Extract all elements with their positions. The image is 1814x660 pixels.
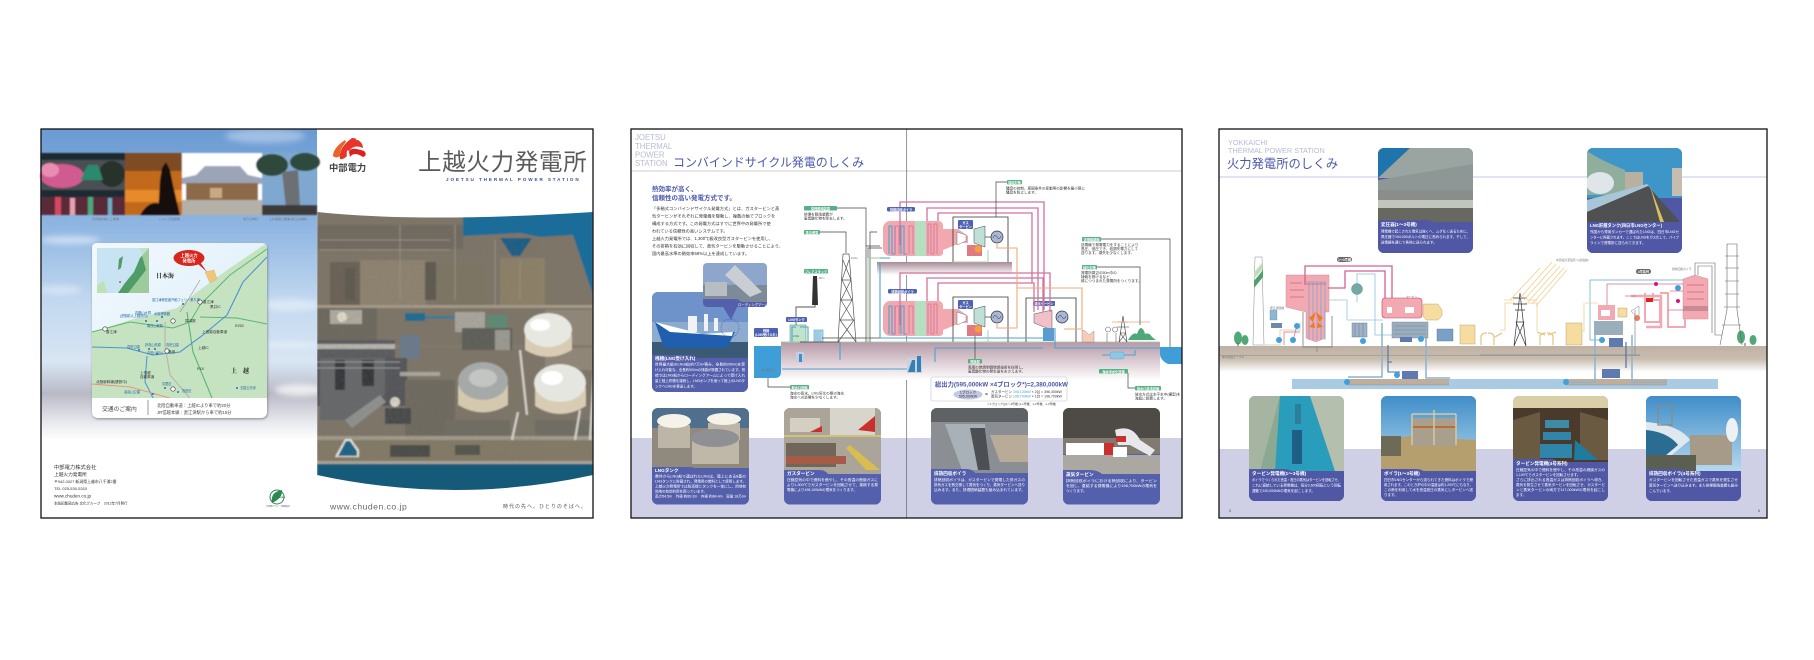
photo card: turbine generator units 1-3: タービン発電機(1〜3号機): [1252, 470, 1307, 477]
label: seawater intake: 海水の取水、LNG気化の際の海水: [790, 390, 845, 396]
intake canal: [1292, 379, 1718, 389]
steam turbine unit: [1026, 298, 1076, 342]
photo card: turbine generator unit 4: ます。: [1516, 492, 1526, 497]
photo card: LNG receiving tank: 外国から専用タンカーで運ばれたLNGは、四日市LNGセ: [1590, 229, 1680, 234]
heading: station name: STATION: [635, 159, 668, 168]
label: environment: 環境対策: [1008, 180, 1022, 185]
lower HRSG and gas turbine: ガス: [962, 300, 969, 305]
label: transmission: 送ります。損失を少なくします。: [1081, 250, 1134, 255]
diagram tags: 排熱回収ボイラ: [1672, 267, 1692, 271]
photo card: boiler units 1-3: この熱を利用して水を高温高圧の蒸気にしタービンへ送: [1384, 487, 1473, 492]
photo card: LNG tanks: 上越火力発電所では防液提とタンクを一体にし、用地有: [655, 484, 747, 488]
inset photo: loading arm: ローディングアーム: [738, 302, 769, 307]
upper HRSG and gas turbine: [883, 217, 1008, 262]
output summary box: =: [985, 392, 988, 398]
label: greenery: 緑化対策: [1083, 265, 1097, 270]
heading: station name: [1228, 138, 1325, 155]
photo card: turbine generator unit 4: さらに排出される高温ガスは排熱回収ボイラへ導き、: [1516, 477, 1605, 482]
combined cycle plant diagram: [754, 180, 1182, 400]
labels: [754, 180, 1181, 400]
company address: TEL 025-530-5310: [54, 486, 88, 491]
photo card: main transformer: 昇圧器で154,000ボルトの電圧に高められます。そして、: [1381, 234, 1470, 239]
label: denitrification: [804, 206, 866, 246]
company address: 上越火力発電所: [54, 471, 87, 478]
photo card: LNG receiving tank: LNG貯蔵タンク(四日市LNGセンター): [1590, 222, 1662, 229]
intro text block: 上越火力発電所では、1,300℃級改良型ガスタービンを使用し、: [652, 235, 773, 242]
substation, transformer and trees: [1082, 316, 1156, 342]
photo card: turbine generator unit 4: 蒸気を発生させて蒸気タービンを回転させ、ガスタービ: [1516, 482, 1606, 487]
vaporiser: [814, 330, 823, 342]
panel: brochure cover: [38, 129, 594, 518]
land: [92, 243, 267, 398]
heading: station name: POWER: [635, 150, 665, 160]
access map card: 清里区: [162, 381, 172, 386]
map place names: 上 越: [231, 367, 249, 375]
company address: 中部電力株式会社: [54, 463, 97, 471]
access map card: 直江津: [106, 329, 117, 334]
label: environment: 騒音を防止します。: [1006, 190, 1038, 194]
intro text block: その排熱を有効に回収して、蒸気タービンを駆動させることにより、: [652, 242, 783, 250]
intro text block: 気タービンがそれぞれに発電機を駆動し、複数の軸でブロックを: [652, 212, 775, 220]
output summary box: 総出力(595,000kW ×4ブロック*)=2,380,000kW: [935, 380, 1068, 388]
access map card: 犀潟駅: [185, 318, 196, 323]
callout: plant location: 上越火力: [180, 252, 198, 259]
photo card: LNG tanks: LNGタンクに貯蔵され、発電用の燃料として使用します。: [655, 478, 746, 484]
upper platform shadow: [877, 262, 1012, 275]
photo card: turbine generator unit 4: 圧縮空気の中で燃料を燃やし、その高温の燃焼ガスの: [1516, 467, 1606, 472]
trees: [1234, 330, 1756, 346]
photo card: steam turbine: [1063, 408, 1160, 505]
ground band: [1219, 346, 1767, 372]
access map card: 上越IC: [198, 345, 209, 350]
LNG tank: [790, 325, 806, 342]
label: transmission: 送電線路網: [1084, 237, 1099, 242]
website url: www.chuden.co.jp: [329, 502, 407, 512]
label: combustor: 燃焼器: [970, 359, 981, 364]
output summary box: 1ブロック: [960, 390, 977, 394]
intro heading: 信頼性の高い発電方式です。: [652, 193, 736, 202]
output summary box: 595,000kW: [959, 394, 978, 398]
panel border: [631, 129, 1182, 518]
access map card: 岩殿山大洞: [135, 310, 151, 315]
label: LNG tank: LNGタンク: [788, 317, 805, 322]
label: seawater intake: 海水への影響を少なくします。: [790, 394, 840, 400]
fuel piping: [781, 232, 1040, 369]
photo card: LNG carrier at jetty: 桟橋(LNG受け入れ): [655, 355, 696, 362]
access map card: R253: [235, 324, 244, 328]
inset map: [97, 248, 149, 293]
photo card: heat recovery boiler unit 4: 排熱回収ボイラ(4号系列): [1649, 470, 1701, 477]
access directions: [102, 400, 232, 416]
photo card: heat recovery boiler: 排熱回収ボイラ: [934, 470, 967, 477]
photo card: gas turbine: ガスタービン: [787, 470, 815, 477]
label: combustor: [968, 336, 1026, 374]
photo card: turbine generator units 1-3: 運動で220,000kWの電気を起こします。: [1252, 488, 1315, 493]
access directions: JR信越本線：直江津駅から車で約15分: [157, 409, 232, 416]
photo card: turbine generator unit 4: [1513, 396, 1608, 501]
access map card: 黒井IC: [210, 304, 221, 309]
label: combustor: 高度の燃焼制御燃焼技術を採用し、: [968, 364, 1026, 370]
access map card: 高田公園: [166, 342, 179, 347]
label: jetty: 海水取水口: [761, 368, 775, 372]
photo captions: レルヒ少佐銅像: [159, 216, 180, 221]
photo card: boiler units 1-3: 四日市LNGセンターから送られてきた燃料はボイラで燃: [1384, 477, 1473, 482]
access map card: 五智公光寺: [240, 385, 257, 390]
right unit piping: [1480, 280, 1683, 382]
intro text block: [652, 205, 783, 257]
exhaust tower: 100m: [851, 256, 859, 260]
access map card: [92, 243, 267, 418]
photo texture: [317, 238, 539, 461]
heading: station name: [635, 133, 673, 168]
photo card: heat recovery boiler: 排熱回収ボイラは、ガスタービンで発電した排ガスの: [934, 477, 1026, 482]
logo: Chubu Electric Power: 中部電力: [329, 162, 366, 173]
page numbers: [1229, 509, 1760, 513]
photo card: LNG tanks: 効地の有効利用を図っています。: [655, 488, 707, 494]
lower HRSG and gas turbine: タービン: [959, 304, 972, 309]
lavender bottom band: [631, 438, 1182, 518]
steam piping: [880, 202, 1160, 362]
heaters, transformer and pumps: [1276, 285, 1681, 385]
photo card: LNG receiving tank: ンターに貯蔵されます。ここではLNGをガス化して、パイプ: [1590, 234, 1679, 240]
access map card: 高田: [168, 349, 176, 354]
tagline: 時代の先へ。ひとりのそばへ。: [503, 503, 587, 510]
page numbers: 6: [1758, 509, 1760, 513]
access map card: 春日山城跡: [147, 323, 164, 328]
label: discharge facility: 海水淡水化設備: [1102, 369, 1125, 374]
photo card: LNG receiving tank: [1586, 148, 1682, 253]
photo card: gas turbine: 圧縮空気の中で燃料を燃やし、その高温の燃焼ガスに: [787, 477, 879, 482]
photo card: boiler units 1-3: 焼されます。このとき炉の中の温度は約1,200℃にもなり、: [1384, 482, 1473, 487]
panel border: [1219, 129, 1767, 518]
access map card: 上信越自動車道: [202, 329, 228, 334]
intro heading: [652, 184, 736, 202]
photo card: heat recovery boiler unit 4: こんでいます。: [1649, 488, 1673, 493]
photo card: heat recovery boiler: 排気ガスを熱交換して蒸気をつくり、蒸気タービンへ送り: [934, 482, 1025, 487]
company address: 〒942-0027 新潟県上越市八千浦2番: [54, 479, 117, 484]
photo strip: local sights: [40, 153, 320, 215]
label: stack: 集合煙突: [806, 230, 819, 235]
photo card: steam turbine: つくります。: [1066, 488, 1087, 493]
photo card: LNG carrier at jetty: 量と陸上貯槽を接続し、LNGポンプを使って陸上のLNGタ: [655, 378, 745, 383]
access map card: (虎御前入上越市内): [120, 313, 148, 318]
label: LNG tank: [786, 317, 807, 322]
sea: [92, 243, 267, 332]
photo card: LNG carrier at jetty: け入れ可能な、全長約500mの桟橋が設置されています。桟: [655, 367, 745, 372]
photo card: heat recovery boiler unit 4: 蒸気タービンへ送り込みます。また排煙脱硝装置も組み: [1649, 482, 1739, 488]
map landmarks: [138, 303, 238, 395]
label: HRSG bottom: 排熱回収ボイラ: [891, 289, 914, 294]
photo card: LNG carrier at jetty: ンクへLNGを移送します。: [655, 384, 697, 388]
flare stack: [796, 276, 825, 328]
title: how combined cycle works: コンバインドサイクル発電のしくみ: [673, 156, 864, 170]
intro heading: 熱効率が高く、: [652, 184, 698, 193]
steam turbine unit: 蒸気タービン: [1034, 301, 1054, 306]
turbine and generator: [1382, 298, 1442, 342]
chimney: [1253, 257, 1264, 345]
access map card: R18: [197, 367, 204, 371]
heading: station name: THERMAL POWER STATION: [1228, 146, 1325, 155]
seawater right: [1160, 347, 1182, 364]
label: greenery: 緑につつまれた発電所をつくります。: [1081, 278, 1142, 283]
photo card: boiler units 1-3: [1381, 396, 1476, 501]
label: discharge facility: [1099, 369, 1128, 374]
photo card: LNG tanks: 県外からLNG船で運ばれたLNGは、陸上にある8基の: [655, 474, 747, 478]
diagram tags: タービン: [1406, 295, 1417, 299]
label: denitrification: 窒素酸化物を除去します。: [804, 216, 847, 220]
access map card: 高田公園: [127, 344, 140, 349]
label: HRSG top: 排熱回収ボイラ: [890, 207, 912, 212]
access map card: 北陸新幹線(建設中): [96, 379, 127, 384]
label: flare stack: フレアスタック: [805, 269, 827, 274]
photo captions: 上杉謙信公銅像(春日山城跡): [269, 216, 307, 221]
label: greenery: 植栽を設けるなど、: [1081, 274, 1113, 279]
label: jetty: [754, 328, 778, 372]
label: environment: [996, 180, 1085, 217]
callout: plant location: 発電所: [183, 258, 196, 264]
output summary box: ガスタービン 198,100kW × 2台 = 396,300kW: [991, 389, 1063, 394]
photo card: LNG receiving tank: ラインで発電所に送られてきます。: [1590, 240, 1645, 245]
photo card: turbine generator unit 4: タービン発電機(4号系列): [1516, 460, 1568, 467]
diagram tags: 中部電力変電所へ(送電線): [1556, 258, 1589, 262]
seawater left: [754, 346, 781, 378]
photo card: main transformer: 変圧器(1〜3号機): [1381, 221, 1417, 228]
label: seawater intake: 取水口設備: [792, 385, 808, 390]
icon: eco mark: [266, 490, 290, 508]
access map card: 上信越: [140, 370, 151, 375]
photo card: turbine generator units 1-3: ボイラでつくられた高温・高圧の蒸気はタービンを回転させ、: [1252, 477, 1341, 482]
photo card: LNG tanks: LNGタンク: [655, 467, 679, 474]
heading: station name: JOETSU: [635, 133, 666, 142]
photo card: steam turbine: 排熱回収ボイラにおける熱回収により、タービン: [1066, 478, 1158, 483]
photo card: turbine generator unit 4: ンと蒸気タービンの両方で117,000kWの電気を起こし: [1516, 487, 1606, 492]
LNG tank: LNG: [793, 334, 800, 338]
photo card: main transformer: 発電機で起こされた電気は強くへ、ムダなく送るために、: [1381, 228, 1470, 234]
intro text block: 「多軸式コンバインドサイクル発電方式」とは、ガスタービンと蒸: [652, 205, 780, 212]
photo card: turbine generator units 1-3: [1249, 396, 1344, 501]
photo captions: [92, 216, 307, 221]
intro text block: 構成する方式です。この発電方式はすでに世界中の発電所で使: [652, 220, 771, 227]
label: greenery: 発電所周辺の50m巾の: [1081, 270, 1117, 275]
roads and rivers: [92, 249, 267, 398]
diagram tags: [1222, 257, 1692, 359]
label: stack: [804, 230, 846, 253]
photo captions: 高田城の桜と三重櫓: [92, 216, 119, 221]
photo card: heat recovery boiler: [931, 408, 1028, 505]
lavender bottom band: [1219, 449, 1767, 518]
heading: station name: YOKKAICHI: [1228, 138, 1268, 147]
label: jetty: 桟橋: [763, 328, 770, 333]
company address: 本誌記載部広告 文化グループ 2012年7月発行: [54, 500, 128, 506]
label: seawater intake: [768, 378, 845, 400]
photo card: gas turbine: より1,300℃でガスタービンを回転させて、接続する発: [787, 482, 879, 487]
access map card: 直江津港佐渡汽船フェリー乗り場: [152, 297, 201, 302]
label: jetty: (LNG受け入れ): [755, 332, 777, 337]
photo card: LNG carrier at jetty: [652, 263, 769, 392]
flare stack: 80m: [819, 276, 825, 280]
photo card: heat recovery boiler: 込みます。また、排煙脱硝装置も組み込まれています。: [934, 487, 1025, 492]
photo card: LNG tanks: 高さ54.5m 外径 約89.2m 内径 約84.4m 容量 18万m³: [655, 494, 747, 498]
photo card: steam turbine: 蒸気タービン: [1066, 471, 1094, 478]
title: Joetsu thermal power station: JOETSU THERMAL POWER STATION: [446, 177, 581, 182]
label: denitrification: 排煙を脱硝装置が: [804, 212, 833, 216]
stations: [103, 300, 202, 391]
output summary box: 蒸気タービン 198,700kW × 1台 = 198,700kW: [991, 394, 1063, 398]
access map card: 高田区: [182, 388, 192, 393]
exhaust tower: [838, 254, 859, 342]
diagram tags: 押込通風機: [1270, 306, 1284, 310]
sky clouds: [38, 129, 325, 396]
map place names: [156, 272, 249, 375]
title: Joetsu thermal power station: 上越火力発電所: [418, 149, 587, 175]
right unit turbine: [1594, 305, 1627, 378]
intro text block: われている信頼性の高いシステムです。: [652, 228, 728, 234]
photo card: heat recovery boiler unit 4: ガスタービンを回転させた高温ガスで蒸気を発生させ: [1649, 477, 1739, 482]
right unit transformer and switchgear: [1537, 323, 1582, 345]
photo card: LNG tanks: [652, 408, 749, 505]
logo: Chubu Electric Power: [329, 138, 366, 173]
boiler: [1286, 275, 1332, 352]
company address: www.chuden.co.jp: [54, 494, 91, 498]
intake pump: [796, 352, 922, 373]
ground: [781, 342, 1160, 380]
photo card: boiler units 1-3: ります。: [1384, 492, 1398, 497]
label: outlet: 放水口放流設備: [1137, 386, 1160, 391]
panel border: [41, 129, 593, 518]
label: transmission: 高圧、低圧でき、低損失電力にして: [1081, 246, 1139, 251]
label: transmission: [1081, 237, 1170, 347]
title: how thermal power works: 火力発電所のしくみ: [1227, 157, 1338, 171]
access map card: 自動車道: [140, 374, 155, 379]
icon: eco mark: CHUBU: [277, 497, 285, 499]
upper HRSG and gas turbine: タービン: [959, 224, 972, 229]
output summary box: [931, 377, 1068, 406]
air preheater and fans: [1262, 310, 1300, 345]
label: HRSG top: [887, 207, 915, 212]
lattice stack: [1695, 244, 1742, 345]
heading: station name: THERMAL: [635, 142, 673, 151]
label: outlet: [1128, 373, 1181, 400]
label: environment: 騒音の抑制、周囲条件の変動等の影響を最小限に: [1006, 186, 1085, 190]
label: outlet: 放水方式は水平水中(横型)を: [1135, 392, 1181, 396]
photo card: LNG carrier at jetty: 橋ではLNG船からローディングアームによって受け入れ: [655, 372, 746, 378]
transmission tower and lines: [1500, 262, 1598, 346]
icon: eco mark: 中部電力グループ環境宣言: [266, 504, 290, 508]
photo card: turbine generator unit 4: 1,100℃でガスタービンを回転させます。: [1516, 472, 1580, 477]
panel: thermal power station explanation: [1219, 129, 1767, 518]
access directions: 交通のご案内: [102, 405, 137, 413]
label: transmission: 送電線で発電電力をすることにより: [1081, 242, 1138, 247]
photo card: turbine generator units 1-3: これに直結している発電機は、毎分3,600回転という回転: [1252, 482, 1341, 488]
photo card: gas turbine: 電機により198,100kWの電気をつくります。: [787, 487, 857, 492]
aerial photograph of power station: [317, 205, 594, 504]
panel: combined cycle explanation: [631, 129, 1182, 518]
access map card: 直江津: [203, 299, 214, 304]
right unit HRSG: [1631, 275, 1708, 327]
sky background: [41, 129, 317, 518]
intro text block: 国内最高水準の熱効率58%以上を達成しています。: [652, 250, 749, 257]
photo card: steam turbine: を回し、直結する発電機により198,700kWの電気を: [1066, 483, 1158, 488]
access map card: 水族博物館: [154, 311, 171, 316]
map place names: 日本海: [156, 272, 174, 280]
label: HRSG bottom: [888, 289, 917, 294]
photo card: main transformer: [1378, 148, 1473, 253]
diagram tags: 地中送電ケーブル: [1222, 355, 1244, 359]
page numbers: 3: [1229, 509, 1231, 513]
label: greenery: [1081, 265, 1142, 325]
callout: plant location: [174, 250, 217, 283]
photo card: boiler units 1-3: ボイラ(1〜3号機): [1384, 470, 1420, 477]
access map card: 青田川河川: [147, 350, 163, 355]
left unit piping: [1305, 266, 1450, 378]
diagram tags: 1〜3号機: [1338, 257, 1352, 262]
company address: [54, 463, 128, 506]
label: combustor: 窒素酸化物の発生量をおさえます。: [968, 368, 1025, 374]
upper HRSG and gas turbine: ガス: [962, 220, 969, 225]
access map card: 金谷山公園: [124, 389, 140, 394]
desalination equipment: [1102, 350, 1135, 359]
lower HRSG and gas turbine: [883, 297, 1008, 342]
diagram tags: 4号系列: [1638, 269, 1649, 274]
thermal plant diagram: [1219, 244, 1767, 389]
photo card: heat recovery boiler unit 4: [1646, 396, 1741, 501]
gas tanks: [458, 313, 594, 440]
photo card: gas turbine: [784, 408, 881, 505]
label: outlet: 海底に設置します。: [1135, 396, 1167, 400]
label: denitrification: 排煙脱硝装置: [811, 206, 831, 211]
access map card: 妙高山高原: [145, 342, 162, 347]
photo card: main transformer: 送電線を通じて各地に送られます。: [1381, 240, 1437, 244]
photo card: LNG carrier at jetty: 世界最大級のLNG船(約7万m³積み、全長約290m)を受: [655, 362, 746, 366]
access directions: 北陸自動車道：上越ICより車で約20分: [157, 402, 231, 409]
output summary box: ※1ブロックは1〜4号機 (1-1号機、1-2号機、1-3号機): [987, 401, 1056, 406]
photo captions: 春日山神社: [243, 216, 258, 221]
